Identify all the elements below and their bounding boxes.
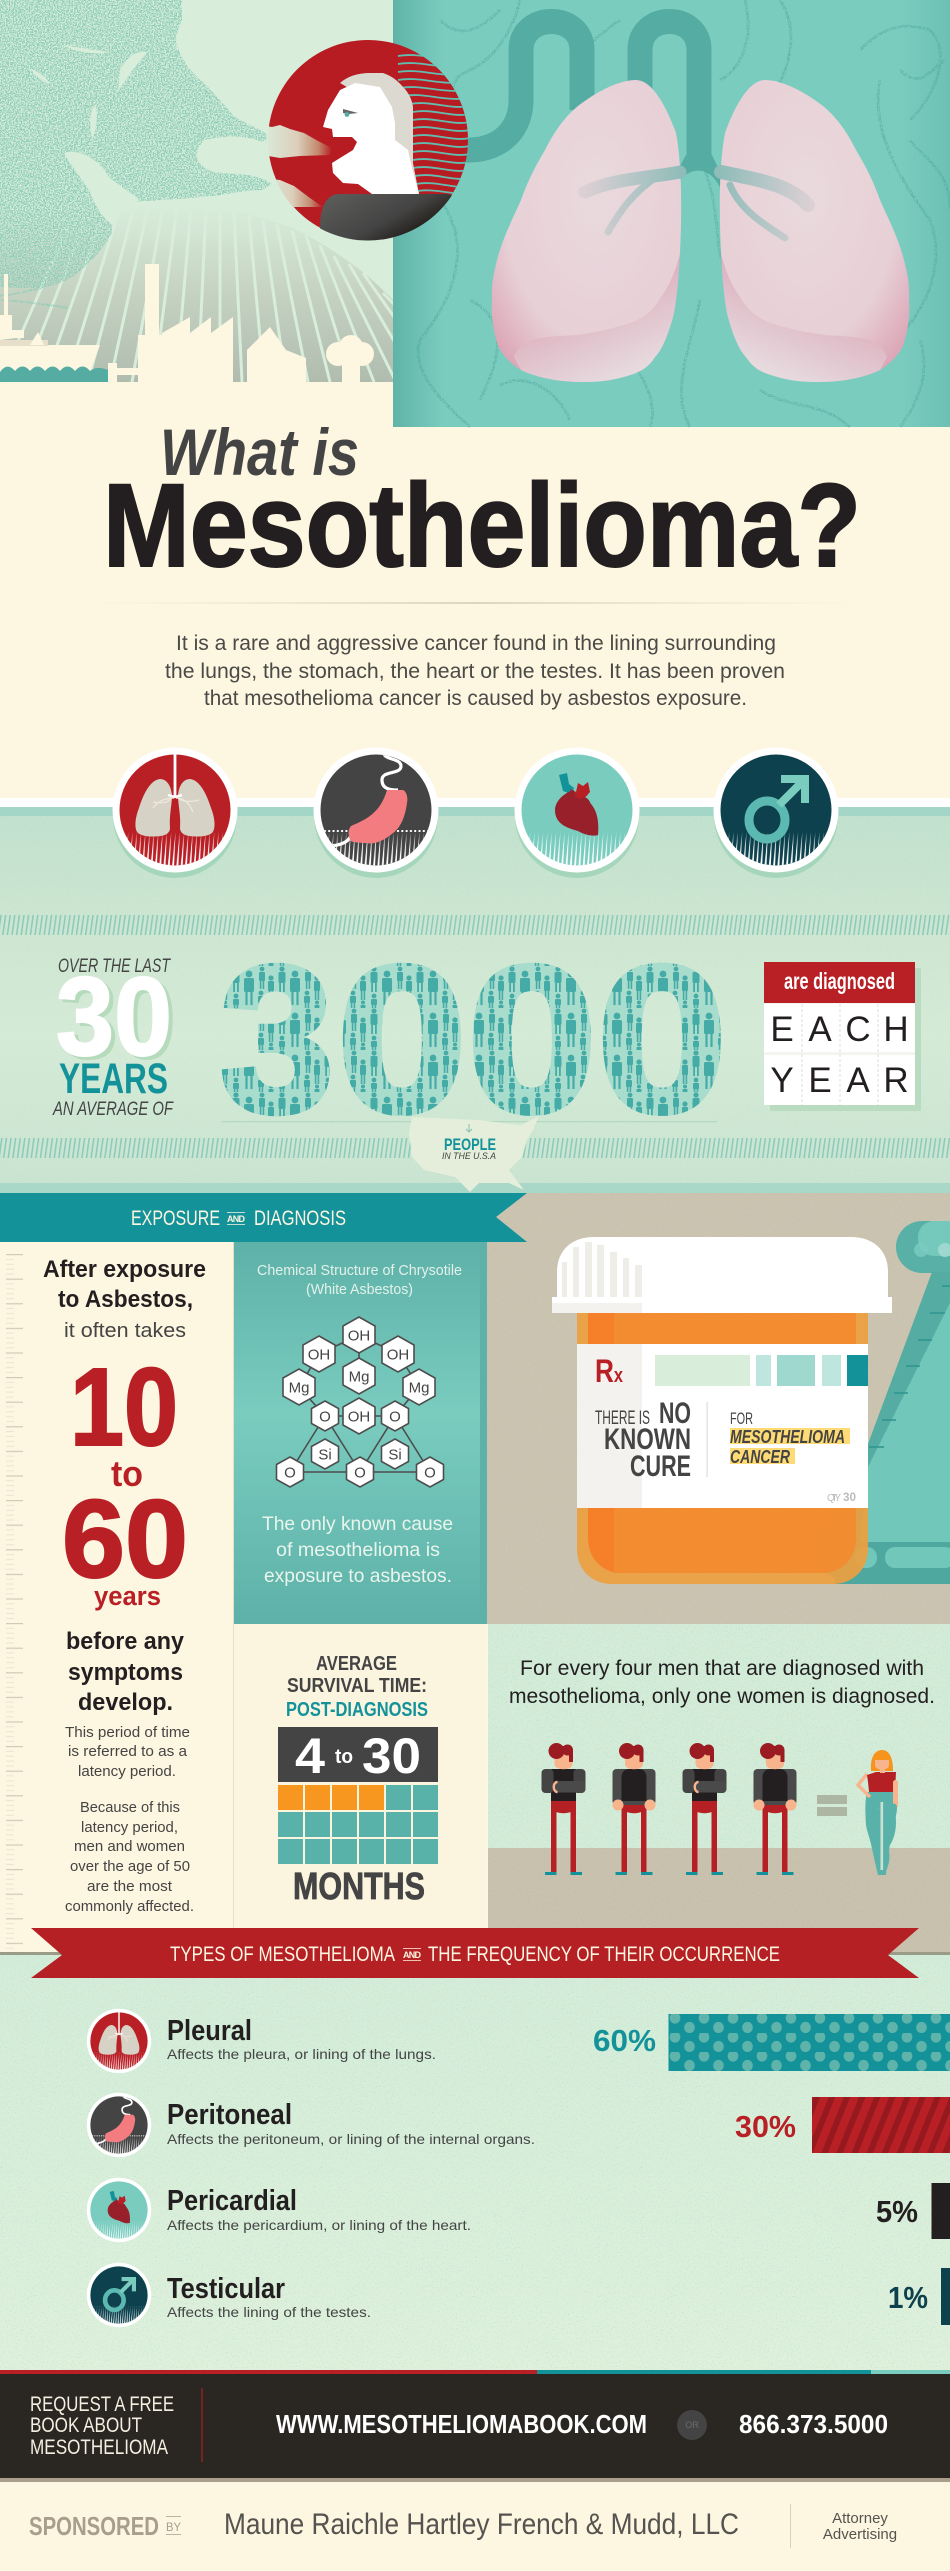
molecule diagram: O	[424, 1464, 436, 1482]
type row: testicular: 1%	[888, 2280, 928, 2315]
panel: latency timeline: This period of time	[65, 1724, 190, 1741]
pill bottle: QTY	[827, 1493, 841, 1504]
flip card: are diagnosed each year: R	[883, 1061, 909, 1100]
pill bottle	[552, 1237, 892, 1584]
equals sign	[817, 1795, 847, 1816]
type row: pericardial: Affects the pericardium, or lining of the heart.	[167, 2217, 471, 2233]
panel: latency timeline: symptoms	[68, 1659, 183, 1686]
icon: male symbol	[714, 748, 838, 878]
panel: latency timeline: to Asbestos,	[58, 1286, 193, 1313]
title: What is: What is	[160, 415, 359, 489]
type row: pleural: Affects the pleura, or lining of the lungs.	[167, 2046, 436, 2062]
flip card: are diagnosed each year: A	[846, 1061, 870, 1100]
no known cure label: KNOWN	[604, 1423, 691, 1456]
footer call to action	[0, 2370, 950, 2482]
no known cure label: NO	[659, 1397, 691, 1430]
organ icons row	[112, 748, 838, 878]
4 to 30 box: 4	[295, 1728, 325, 1784]
molecule diagram: O	[354, 1464, 366, 1482]
type row: testicular	[87, 2263, 950, 2327]
for mesothelioma cancer label: CANCER	[730, 1447, 790, 1467]
USA map with people label: IN THE U.S.A	[442, 1151, 496, 1161]
USA map with people label	[409, 1116, 539, 1192]
flip card: are diagnosed each year: H	[883, 1010, 909, 1049]
footer call to action: WWW.MESOTHELIOMABOOK.COM	[276, 2409, 647, 2439]
panel: latency timeline: 60	[62, 1478, 188, 1601]
panel: latency timeline: over the age of 50	[70, 1858, 190, 1875]
icon: stomach	[314, 748, 438, 878]
for mesothelioma cancer label: FOR	[730, 1409, 753, 1428]
panel: men versus women	[488, 1624, 950, 1954]
hero right panel: lungs	[393, 0, 950, 427]
no known cure label: CURE	[630, 1450, 691, 1483]
icon: lungs	[112, 748, 238, 878]
panel: chemical structure: Chemical Structure of Chrysotile	[257, 1263, 462, 1279]
type row: peritoneal: Affects the peritoneum, or lining of the internal organs.	[167, 2131, 535, 2147]
footer call to action: MESOTHELIOMA	[30, 2436, 168, 2459]
molecule diagram: OH	[348, 1408, 370, 1426]
molecule diagram: Mg	[349, 1368, 369, 1386]
bronchi	[585, 172, 808, 238]
flip card: are diagnosed each year	[764, 962, 921, 1111]
flip card: are diagnosed each year: are diagnosed	[784, 968, 895, 994]
figure: woman	[858, 1750, 898, 1875]
portrait circle	[262, 40, 470, 245]
4 to 30 box	[278, 1727, 438, 1784]
type row: pleural: 60%	[593, 2023, 656, 2058]
stat: over the last 30 years: 30	[56, 955, 172, 1079]
Rx mark: Rx	[595, 1353, 623, 1389]
footer call to action: 866.373.5000	[739, 2409, 888, 2439]
molecule diagram: Mg	[409, 1380, 429, 1396]
big number 3000 made of people: 0	[337, 924, 467, 1156]
molecule diagram	[276, 1317, 444, 1487]
panel: chemical structure: The only known cause	[262, 1514, 453, 1535]
flip card: are diagnosed each year: A	[808, 1010, 832, 1049]
sponsor line: Maune Raichle Hartley French & Mudd, LLC	[224, 2508, 739, 2541]
type row: testicular: Affects the lining of the testes.	[167, 2304, 371, 2320]
panel: latency timeline: latency period,	[81, 1819, 178, 1836]
panel: types section background	[0, 1952, 950, 2370]
ribbon: exposure and diagnosis: DIAGNOSIS	[254, 1207, 346, 1230]
panel: latency timeline: latency period.	[78, 1763, 176, 1780]
statistics band	[0, 798, 950, 1193]
panel: men versus women: mesothelioma, only one women is diagnosed.	[509, 1685, 935, 1708]
molecule diagram: Si	[318, 1446, 332, 1464]
type row: pleural: Pleural	[167, 2015, 252, 2047]
ribbon: types of mesothelioma: AND	[403, 1950, 422, 1960]
molecule diagram: O	[389, 1408, 401, 1426]
panel: chemical structure: of mesothelioma is	[276, 1540, 440, 1561]
footer call to action: REQUEST A FREE	[30, 2393, 174, 2416]
panel: survival time: MONTHS	[293, 1866, 425, 1908]
molecule diagram: O	[284, 1464, 296, 1482]
sponsor line: BY	[166, 2520, 181, 2534]
big number 3000 made of people: 0	[597, 924, 727, 1156]
hero left panel: smoke and factories	[0, 0, 470, 382]
footer call to action: BOOK ABOUT	[30, 2414, 142, 2437]
panel: men versus women: For every four men that are diagnosed with	[520, 1657, 924, 1680]
title: Mesothelioma?: Mesothelioma?	[103, 460, 861, 592]
type row: testicular: Testicular	[167, 2273, 285, 2305]
ribbon: exposure and diagnosis: EXPOSURE	[131, 1207, 220, 1230]
stat: over the last 30 years: OVER THE LAST	[58, 956, 171, 977]
panel: survival time: SURVIVAL TIME:	[287, 1675, 427, 1697]
icon: heart	[514, 748, 640, 878]
intro paragraph	[165, 632, 785, 710]
panel: latency timeline: is referred to as a	[68, 1743, 188, 1760]
right lung	[720, 80, 909, 382]
ribbon: types of mesothelioma	[31, 1928, 919, 1978]
panel: latency timeline: commonly affected.	[65, 1898, 194, 1915]
icon: water	[0, 366, 108, 382]
panel: latency timeline: men and women	[74, 1838, 185, 1855]
icon: flask	[816, 1221, 950, 1584]
panel: chemical structure	[234, 1242, 487, 1624]
intro paragraph: the lungs, the stomach, the heart or the testes. It has been proven	[165, 660, 785, 683]
molecule diagram: OH	[348, 1328, 370, 1344]
sponsor line	[29, 2504, 897, 2548]
no known cure label: THERE IS	[595, 1408, 650, 1429]
panel: latency timeline: it often takes	[64, 1320, 186, 1342]
molecule diagram: OH	[308, 1346, 330, 1364]
type row: peritoneal: Peritoneal	[167, 2099, 292, 2131]
big number 3000 made of people: 0	[467, 924, 597, 1156]
icon: house	[247, 327, 306, 382]
stat: over the last 30 years: 30	[60, 958, 176, 1082]
hero illustration	[0, 0, 950, 427]
intro paragraph: It is a rare and aggressive cancer found in the lining surrounding	[176, 632, 776, 655]
flip card: are diagnosed each year: C	[845, 1010, 871, 1049]
type row: pericardial: Pericardial	[167, 2185, 297, 2217]
molecule diagram: Si	[388, 1446, 402, 1464]
panel: latency timeline: years	[94, 1581, 161, 1611]
panel: survival time: AVERAGE	[316, 1653, 397, 1675]
big number 3000 made of people: 3	[220, 924, 334, 1156]
figures: four men	[542, 1743, 796, 1875]
USA map with people label: PEOPLE	[444, 1135, 496, 1154]
flip card: are diagnosed each year: Y	[770, 1061, 794, 1100]
panel: latency timeline: to	[111, 1453, 143, 1494]
no known cure label	[595, 1397, 691, 1483]
panel: survival time: POST-DIAGNOSIS	[286, 1699, 428, 1721]
type row: pericardial: 5%	[876, 2194, 918, 2229]
intro paragraph: that mesothelioma cancer is caused by asbestos exposure.	[204, 687, 747, 710]
icon: factory	[108, 264, 233, 382]
icon: ship	[0, 274, 100, 372]
sponsor line: SPONSORED	[29, 2511, 159, 2541]
left lung	[492, 80, 681, 382]
molecule diagram: OH	[387, 1346, 409, 1364]
18 month grid	[278, 1785, 438, 1864]
panel: tan backdrop with flask and pill bottle	[487, 1193, 950, 1624]
flip card: are diagnosed each year: E	[808, 1061, 832, 1100]
icon: tree	[326, 335, 374, 382]
stat: over the last 30 years: AN AVERAGE OF	[52, 1099, 174, 1120]
ribbon: types of mesothelioma: THE FREQUENCY OF THEIR OCCURRENCE	[428, 1943, 780, 1966]
panel: latency timeline: develop.	[78, 1689, 173, 1716]
panel: latency timeline: 10	[70, 1346, 178, 1469]
for mesothelioma cancer label: MESOTHELIOMA	[730, 1427, 845, 1447]
flip card: are diagnosed each year: E	[770, 1010, 794, 1049]
panel: latency timeline	[0, 1242, 234, 1954]
type row: pleural	[87, 2009, 950, 2073]
type row: pericardial	[87, 2178, 950, 2242]
big number 3000 made of people	[220, 924, 727, 1156]
panel: latency timeline: Because of this	[80, 1799, 180, 1816]
for mesothelioma cancer label	[730, 1409, 850, 1467]
4 to 30 box: to	[335, 1746, 353, 1768]
sponsor line: Advertising	[823, 2526, 897, 2543]
panel: latency timeline: After exposure	[43, 1256, 206, 1283]
sponsor line: Attorney	[832, 2510, 888, 2527]
panel: chemical structure: (White Asbestos)	[306, 1282, 413, 1298]
panel: latency timeline: are the most	[87, 1878, 173, 1895]
panel: latency timeline: before any	[66, 1628, 185, 1655]
molecule diagram: O	[319, 1408, 331, 1426]
type row: peritoneal: 30%	[735, 2109, 796, 2144]
panel: survival time	[234, 1624, 495, 1954]
molecule diagram: Mg	[289, 1380, 309, 1396]
ribbon: exposure and diagnosis	[0, 1193, 527, 1242]
ribbon: exposure and diagnosis: AND	[227, 1214, 246, 1224]
panel: chemical structure: exposure to asbestos.	[264, 1566, 452, 1587]
footer call to action: OR	[685, 2420, 699, 2430]
stat: over the last 30 years: YEARS	[59, 1055, 168, 1103]
pill bottle: 30	[843, 1490, 856, 1504]
trachea tube	[462, 22, 699, 170]
4 to 30 box: 30	[362, 1728, 421, 1784]
type row: peritoneal	[87, 2093, 950, 2157]
ribbon: types of mesothelioma: TYPES OF MESOTHELIOMA	[170, 1943, 395, 1966]
